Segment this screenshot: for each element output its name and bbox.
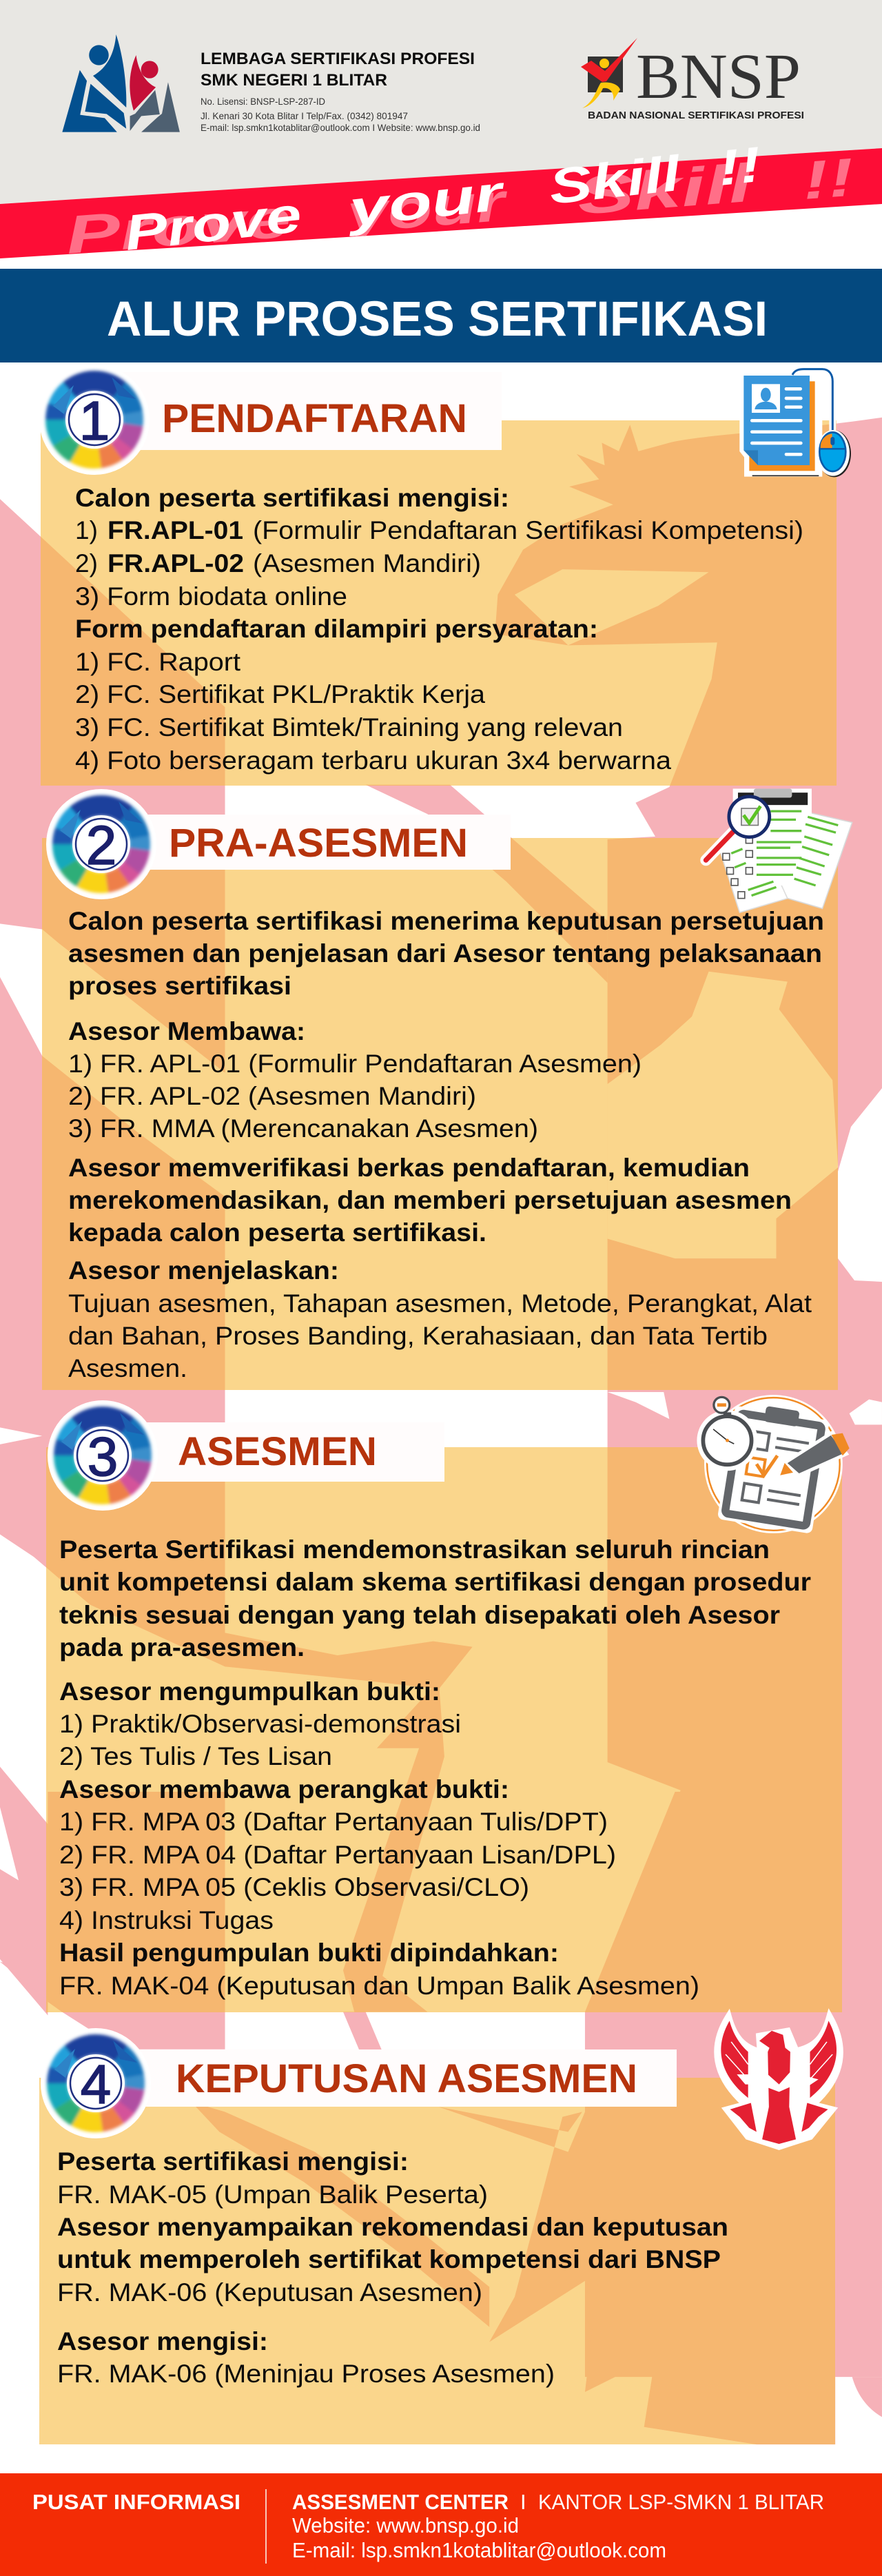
heading: pra-asesmen: PRA-ASESMEN [169, 821, 468, 866]
badge: step 4 [41, 2028, 151, 2138]
text block: teknis sesuai dengan yang telah disepakati oleh Asesor [59, 1601, 780, 1629]
badge: step 1: 1 [79, 390, 110, 451]
text block: FR. MAK-04 (Keputusan dan Umpan Balik Asesmen) [59, 1972, 699, 2000]
text block: 3) FR. MMA (Merencanakan Asesmen) [68, 1114, 538, 1143]
panel: step 1 pendaftaran [39, 365, 851, 786]
banner ghost slogan: !! [801, 147, 856, 211]
text block: Hasil pengumpulan bukti dipindahkan: [59, 1939, 559, 1967]
badge: step 1 [39, 365, 150, 475]
text block: FR.APL-02 [107, 549, 244, 577]
organisation name: LEMBAGA SERTIFIKASI PROFESI [201, 50, 475, 68]
red banner [0, 148, 882, 258]
text block: (Formulir Pendaftaran Sertifikasi Kompetensi) [253, 516, 803, 544]
logo: BNSP [581, 38, 804, 121]
panel: step 2 pra-asesmen [42, 788, 852, 1390]
text block: 2) Tes Tulis / Tes Lisan [59, 1742, 332, 1770]
text block: 3) FR. MPA 05 (Ceklis Observasi/CLO) [59, 1873, 529, 1901]
organisation name: E-mail: lsp.smkn1kotablitar@outlook.com I Website: www.bnsp.go.id [201, 122, 480, 133]
text block: Asesor membawa perangkat bukti: [59, 1775, 509, 1803]
text block: Asesor mengisi: [57, 2327, 268, 2355]
icon: stopwatch, clipboard and pencil [697, 1395, 850, 1534]
footer: contact information: PUSAT INFORMASI [32, 2490, 240, 2514]
badge: step 3: 3 [88, 1426, 118, 1487]
banner slogan: your [344, 165, 509, 237]
panel: step 3 asesmen [46, 1395, 850, 2012]
text block: pada pra-asesmen. [59, 1633, 305, 1662]
text block: 1) FR. APL-01 (Formulir Pendaftaran Asesmen) [68, 1050, 642, 1078]
logo: BNSP: BNSP [636, 41, 801, 112]
text block: Form pendaftaran dilampiri persyaratan: [75, 615, 598, 643]
text block: merekomendasikan, dan memberi persetujuan asesmen [68, 1186, 792, 1214]
text block: Asesmen. [68, 1354, 187, 1382]
background: grey header [0, 0, 882, 204]
banner ghost slogan [64, 147, 856, 265]
text block: (Asesmen Mandiri) [253, 549, 481, 577]
footer: contact information: I [520, 2490, 526, 2514]
banner slogan: Prove [122, 187, 304, 261]
footer: contact information: KANTOR LSP-SMKN 1 BLITAR [538, 2490, 824, 2514]
organisation name: No. Lisensi: BNSP-LSP-287-ID [201, 96, 325, 107]
heading: pendaftaran: PENDAFTARAN [162, 396, 467, 441]
text block: Asesor mengumpulkan bukti: [59, 1677, 440, 1706]
text block: unit kompetensi dalam skema sertifikasi dengan prosedur [59, 1568, 811, 1596]
text block [57, 2147, 728, 2388]
background: garuda and map silhouette [0, 418, 882, 2444]
footer: contact information: Website: www.bnsp.go.id [292, 2513, 519, 2537]
text block: 2) FR. APL-02 (Asesmen Mandiri) [68, 1082, 476, 1110]
text block: untuk memperoleh sertifikat kompetensi dari BNSP [57, 2245, 721, 2273]
banner slogan [122, 137, 763, 261]
text block: proses sertifikasi [68, 972, 291, 1000]
heading: asesmen: ASESMEN [178, 1429, 377, 1474]
organisation name: SMK NEGERI 1 BLITAR [201, 71, 387, 90]
text block: FR.APL-01 [107, 516, 243, 544]
text block [68, 907, 824, 1382]
text block: 1) Praktik/Observasi-demonstrasi [59, 1710, 461, 1738]
text block: FR. MAK-06 (Meninjau Proses Asesmen) [57, 2360, 555, 2388]
text block [59, 1535, 811, 2000]
banner ghost slogan: your [341, 171, 511, 244]
title bar [0, 269, 882, 362]
text block: FR. MAK-05 (Umpan Balik Peserta) [57, 2180, 488, 2209]
badge: step 4: 4 [81, 2054, 111, 2115]
title bar: ALUR PROSES SERTIFIKASI [107, 292, 768, 347]
text block: 2) FC. Sertifikat PKL/Praktik Kerja [75, 680, 485, 708]
text block: 3) FC. Sertifikat Bimtek/Training yang relevan [75, 713, 623, 742]
text block [75, 484, 803, 775]
footer: contact information: ASSESMENT CENTER [292, 2490, 509, 2514]
text block: 1) FC. Raport [75, 648, 241, 676]
heading: keputusan asesmen: KEPUTUSAN ASESMEN [176, 2056, 637, 2101]
text block: 4) Foto berseragam terbaru ukuran 3x4 berwarna [75, 746, 671, 775]
logo: LSP SMK Negeri 1 Blitar [62, 34, 180, 132]
text block: Peserta Sertifikasi mendemonstrasikan seluruh rincian [59, 1535, 770, 1564]
text block: dan Bahan, Proses Banding, Kerahasiaan, dan Tata Tertib [68, 1322, 768, 1350]
text block: 4) Instruksi Tugas [59, 1906, 274, 1934]
panel: step 4 keputusan asesmen [39, 2017, 840, 2444]
text block: 2) [75, 549, 98, 577]
organisation name: Jl. Kenari 30 Kota Blitar I Telp/Fax. (0342) 801947 [201, 110, 408, 121]
text block: Calon peserta sertifikasi mengisi: [75, 484, 509, 512]
icon: garuda [717, 2017, 840, 2147]
logo: BNSP: BADAN NASIONAL SERTIFIKASI PROFESI [588, 110, 804, 121]
text block: 1) FR. MPA 03 (Daftar Pertanyaan Tulis/DPT) [59, 1808, 608, 1836]
text block: Asesor Membawa: [68, 1017, 305, 1045]
text block: 3) Form biodata online [75, 582, 347, 611]
footer: contact information: E-mail: lsp.smkn1kotablitar@outlook.com [292, 2538, 666, 2562]
text block: Tujuan asesmen, Tahapan asesmen, Metode, Perangkat, Alat [68, 1289, 812, 1318]
text block: FR. MAK-06 (Keputusan Asesmen) [57, 2278, 482, 2307]
banner ghost slogan: Prove [64, 187, 293, 265]
text block: 2) FR. MPA 04 (Daftar Pertanyaan Lisan/DPL) [59, 1841, 616, 1869]
text block: Asesor menjelaskan: [68, 1256, 339, 1285]
banner slogan: !! [715, 137, 763, 196]
text block: 1) [75, 516, 98, 544]
text block: asesmen dan penjelasan dari Asesor tentang pelaksanaan [68, 939, 822, 968]
text block: kepada calon peserta sertifikasi. [68, 1218, 486, 1247]
banner ghost slogan: Skill [575, 152, 756, 226]
text block: Asesor memverifikasi berkas pendaftaran, kemudian [68, 1154, 750, 1182]
footer: contact information [0, 2473, 882, 2576]
icon: checklists and magnifier [706, 788, 852, 912]
text block: Peserta sertifikasi mengisi: [57, 2147, 409, 2176]
banner slogan: Skill [546, 146, 684, 215]
icon: document and mouse [739, 369, 851, 477]
badge: step 2: 2 [86, 815, 116, 876]
text block: Calon peserta sertifikasi menerima keputusan persetujuan [68, 907, 824, 935]
badge: step 3 [48, 1400, 158, 1511]
organisation name [201, 50, 480, 133]
text block: Asesor menyampaikan rekomendasi dan keputusan [57, 2213, 728, 2241]
badge: step 2 [46, 789, 156, 899]
